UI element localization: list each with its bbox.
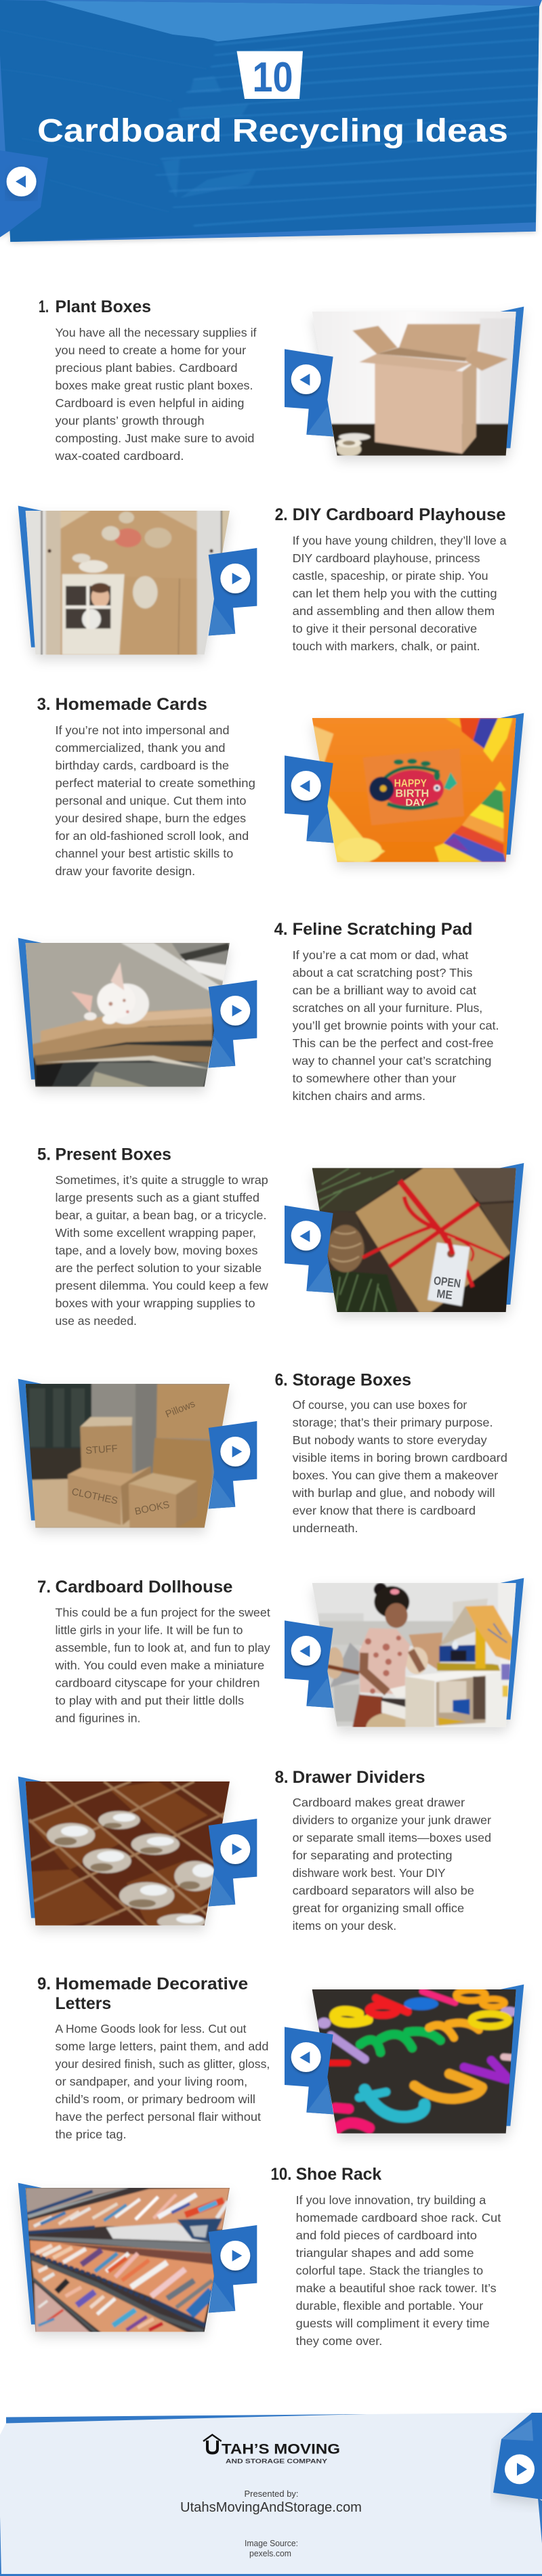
footer arrow tab (493, 2413, 542, 2499)
text block 2: DIY cardboard playhouse, princess (293, 551, 480, 565)
heading 2: DIY Cardboard Playhouse (293, 505, 506, 524)
heading 9: 9. (37, 1975, 51, 1993)
text block 3: your desired shape, burn the edges (56, 811, 246, 825)
section 4: feline scratching pad (18, 920, 499, 1103)
number badge 10 (237, 51, 303, 101)
company logo (203, 2434, 340, 2466)
arrow tab (209, 548, 257, 635)
arrow tab (285, 1206, 333, 1293)
header banner (0, 0, 542, 245)
text block 1: precious plant babies. Cardboard (56, 361, 237, 375)
image source: Image Source: (245, 2539, 298, 2548)
text block 6: with burlap and glue, and nobody will (292, 1486, 495, 1500)
text block 3: channel your best artistic skills to (56, 847, 233, 860)
text block 6: storage; that’s their primary purpose. (293, 1416, 493, 1429)
photo frame 8: dividers with glass discs (18, 1777, 257, 1929)
text block 10: they come over. (296, 2334, 382, 2348)
text block 1: Cardboard is even helpful in aiding (56, 396, 244, 410)
text block 10: durable, flexible and portable. Your (296, 2299, 483, 2313)
text block 8: for separating and protecting (293, 1849, 453, 1862)
text block 5: Sometimes, it’s quite a struggle to wrap (56, 1173, 268, 1187)
photo frame 6: labelled storage boxes: STUFF (85, 1443, 118, 1456)
heading 7: 7. (37, 1578, 51, 1597)
arrow tab (209, 2225, 257, 2313)
heading 1: 1. (39, 297, 49, 316)
arrow tab (209, 1819, 257, 1906)
text block 2: If you have young children, they’ll love a (293, 534, 507, 547)
text block 8: dividers to organize your junk drawer (293, 1813, 491, 1827)
photo frame 4: cat on cardboard (18, 938, 257, 1090)
text block 4: you’ll get brownie points with your cat. (293, 1019, 499, 1032)
number badge 10: 10 (252, 54, 293, 101)
text block 6: boxes. You can give them a makeover (293, 1469, 498, 1482)
photo frame 3: birthday card: BIRTH (395, 788, 429, 800)
photo frame 5: wrapped gift (285, 1163, 524, 1317)
text block 10 (296, 2193, 501, 2348)
text block 8: Cardboard makes great drawer (293, 1796, 465, 1809)
text block 2: castle, spaceship, or pirate ship. You (293, 569, 488, 583)
text block 8 (293, 1796, 491, 1933)
text block 2: can let them help you with the cutting (293, 587, 497, 600)
text block 2: and assembling and then allow them (293, 604, 495, 618)
text block 3: personal and unique. Cut them into (56, 794, 247, 807)
text block 1 (54, 326, 257, 463)
heading 9: Homemade Decorative (56, 1975, 248, 1993)
presented by: UtahsMovingAndStorage.com (180, 2500, 362, 2515)
company logo: TAH’S MOVING (222, 2441, 340, 2457)
text block 1: You have all the necessary supplies if (56, 326, 257, 339)
heading 10: 10. (271, 2165, 291, 2184)
text block 5: large presents such as a giant stuffed (56, 1191, 259, 1204)
arrow tab (209, 980, 257, 1068)
text block 4: can be a brilliant way to avoid cat (293, 984, 476, 997)
text block 10: and fold pieces of cardboard into (296, 2229, 477, 2242)
heading 6: Storage Boxes (293, 1370, 411, 1389)
text block 1: you need to create a home for your (56, 343, 246, 357)
text block 1: wax-coated cardboard. (54, 449, 184, 463)
text block 10: triangular shapes and add some (296, 2246, 474, 2260)
heading 7: Cardboard Dollhouse (56, 1578, 233, 1597)
text block 10: homemade cardboard shoe rack. Cut (296, 2211, 501, 2224)
text block 3: perfect material to create something (56, 776, 255, 790)
text block 5 (56, 1173, 268, 1328)
text block 6: visible items in boring brown cardboard (293, 1451, 507, 1464)
text block 4: This can be the perfect and cost-free (293, 1036, 494, 1050)
section 3: homemade cards (37, 695, 524, 878)
footer panel (0, 2413, 542, 2576)
text block 7: cardboard cityscape for your children (56, 1676, 260, 1689)
text block 6: ever know that there is cardboard (293, 1504, 476, 1517)
heading 3: Homemade Cards (56, 695, 207, 714)
heading 4: Feline Scratching Pad (293, 920, 472, 939)
footer background (0, 2413, 542, 2576)
text block 9 (56, 2022, 270, 2141)
text block 2: touch with markers, chalk, or paint. (293, 639, 480, 653)
text block 10: If you love innovation, try building a (296, 2193, 486, 2207)
text block 6: underneath. (293, 1521, 358, 1535)
photo frame 7: girl with dollhouse (285, 1578, 524, 1744)
text block 8: dishware work best. Your DIY (293, 1866, 446, 1880)
text block 4: scratches on all your furniture. Plus, (293, 1001, 482, 1015)
photo frame 6: labelled storage boxes: BOOKS (134, 1500, 171, 1517)
text block 5: are the perfect solution to your sizable (56, 1261, 262, 1275)
text block 3: If you’re not into impersonal and (56, 723, 229, 737)
section 1: plant boxes (39, 297, 524, 463)
text block 7: to play with and put their little dolls (56, 1693, 244, 1707)
text block 2: to give it their personal decorative (293, 622, 477, 635)
text block 9: some large letters, paint them, and add (56, 2040, 268, 2053)
heading 8: 8. (275, 1768, 289, 1787)
heading 2: 2. (275, 505, 288, 524)
photo frame 5: wrapped gift: OPEN (433, 1273, 461, 1290)
text block 10: make a beautiful shoe rack tower. It’s (296, 2281, 497, 2295)
text block 3: commercialized, thank you and (56, 741, 225, 755)
arrow tab (209, 1421, 257, 1508)
section 2: playhouse (18, 505, 507, 658)
text block 5: tape, and a lovely bow, moving boxes (56, 1244, 258, 1257)
heading 10: Shoe Rack (296, 2165, 381, 2184)
text block 2 (293, 534, 507, 653)
photo frame 2: child in playhouse (18, 506, 257, 658)
text block 4: If you’re a cat mom or dad, what (293, 948, 468, 962)
text block 9: have the perfect personal flair without (56, 2110, 261, 2124)
text block 3: birthday cards, cardboard is the (56, 759, 229, 772)
text block 7: with. You could even make a miniature (54, 1658, 264, 1672)
text block 3: draw your favorite design. (56, 864, 195, 878)
photo frame 3: birthday card: DAY (405, 797, 426, 808)
heading 5: 5. (37, 1145, 51, 1164)
text block 6 (292, 1398, 507, 1535)
text block 1: composting. Just make sure to avoid (56, 431, 255, 445)
text block 9: your desired finish, such as glitter, gloss, (56, 2057, 270, 2071)
text block 7: little girls in your life. It will be fun to (56, 1623, 243, 1637)
heading 4: 4. (274, 920, 288, 939)
text block 8: items on your desk. (293, 1919, 396, 1933)
heading 9: Letters (56, 1994, 111, 2013)
text block 5: boxes with your wrapping supplies to (56, 1296, 255, 1310)
photo frame 9: felt alphabet letters (285, 1985, 524, 2137)
text block 9: the price tag. (56, 2128, 126, 2141)
text block 5: With some excellent wrapping paper, (56, 1226, 256, 1240)
text block 9: A Home Goods look for less. Cut out (56, 2022, 247, 2035)
text block 5: bear, a guitar, a bean bag, or a tricycle. (56, 1208, 267, 1222)
photo frame 3: birthday card (285, 713, 524, 865)
text block 8: or separate small items—boxes used (293, 1831, 491, 1844)
presented by (180, 2489, 362, 2515)
text block 9: or sandpaper, and your living room, (56, 2075, 247, 2088)
text block 3: for an old-fashioned scroll look, and (56, 829, 249, 843)
heading 9 (37, 1975, 248, 2013)
section 10: shoe rack (18, 2165, 501, 2348)
text block 6: Of course, you can use boxes for (293, 1398, 467, 1412)
text block 8: great for organizing small office (293, 1901, 464, 1915)
arrow tab (285, 1620, 333, 1708)
text block 8: cardboard separators will also be (293, 1884, 474, 1897)
text block 4: about a cat scratching post? This (293, 966, 473, 979)
text block 9: child’s room, or primary bedroom will (56, 2092, 255, 2106)
text block 7 (54, 1605, 270, 1725)
heading 5: Present Boxes (56, 1145, 171, 1164)
banner photo: stacked cardboard in blue tint (0, 0, 542, 245)
text block 4 (292, 948, 499, 1103)
text block 10: colorful tape. Stack the triangles to (296, 2264, 483, 2277)
section 8: drawer dividers (18, 1768, 491, 1933)
text block 10: guests will compliment it every time (296, 2317, 490, 2330)
banner background layers (0, 0, 542, 242)
arrow tab (285, 349, 333, 436)
text block 7: and figurines in. (56, 1711, 141, 1725)
image source: pexels.com (249, 2549, 291, 2558)
photo frame 5: wrapped gift: ME (436, 1286, 453, 1302)
title: Cardboard Recycling Ideas (37, 113, 508, 149)
text block 6: But nobody wants to store everyday (293, 1433, 487, 1447)
text block 3 (56, 723, 255, 878)
text block 4: kitchen chairs and arms. (293, 1089, 425, 1103)
photo frame 6: labelled storage boxes (18, 1379, 257, 1531)
text block 5: present dilemma. You could keep a few (56, 1279, 268, 1292)
text block 1: your plants’ growth through (56, 414, 205, 427)
photo frame 1: open cardboard box (285, 305, 524, 463)
heading 1: Plant Boxes (56, 297, 151, 316)
company logo: AND STORAGE COMPANY (226, 2458, 328, 2466)
text block 7: This could be a fun project for the sweet (56, 1605, 270, 1619)
presented by: Presented by: (244, 2489, 298, 2499)
banner side tab with back arrow (0, 150, 48, 237)
section 7: dollhouse (37, 1578, 524, 1744)
text block 4: to somewhere other than your (293, 1072, 457, 1085)
section 6: storage boxes (18, 1370, 507, 1535)
photo frame 10: shoe rack shelves (18, 2183, 257, 2335)
section 5: present boxes (37, 1145, 524, 1328)
text block 7: assemble, fun to look at, and fun to play (56, 1641, 270, 1654)
image source (245, 2539, 298, 2558)
text block 1: boxes make great rustic plant boxes. (56, 379, 253, 392)
heading 8: Drawer Dividers (293, 1768, 425, 1787)
heading 3: 3. (37, 695, 51, 714)
arrow tab (285, 2027, 333, 2114)
text block 4: way to channel your cat’s scratching (292, 1054, 492, 1068)
heading 6: 6. (275, 1370, 288, 1389)
photo frame 3: birthday card: HAPPY (394, 778, 427, 790)
text block 5: use as needed. (56, 1314, 137, 1328)
arrow tab (285, 755, 333, 843)
photo frame 6: labelled storage boxes: Pillows (164, 1399, 196, 1420)
section 9: decorative letters (37, 1975, 524, 2141)
photo frame 6: labelled storage boxes: CLOTHES (70, 1487, 119, 1507)
